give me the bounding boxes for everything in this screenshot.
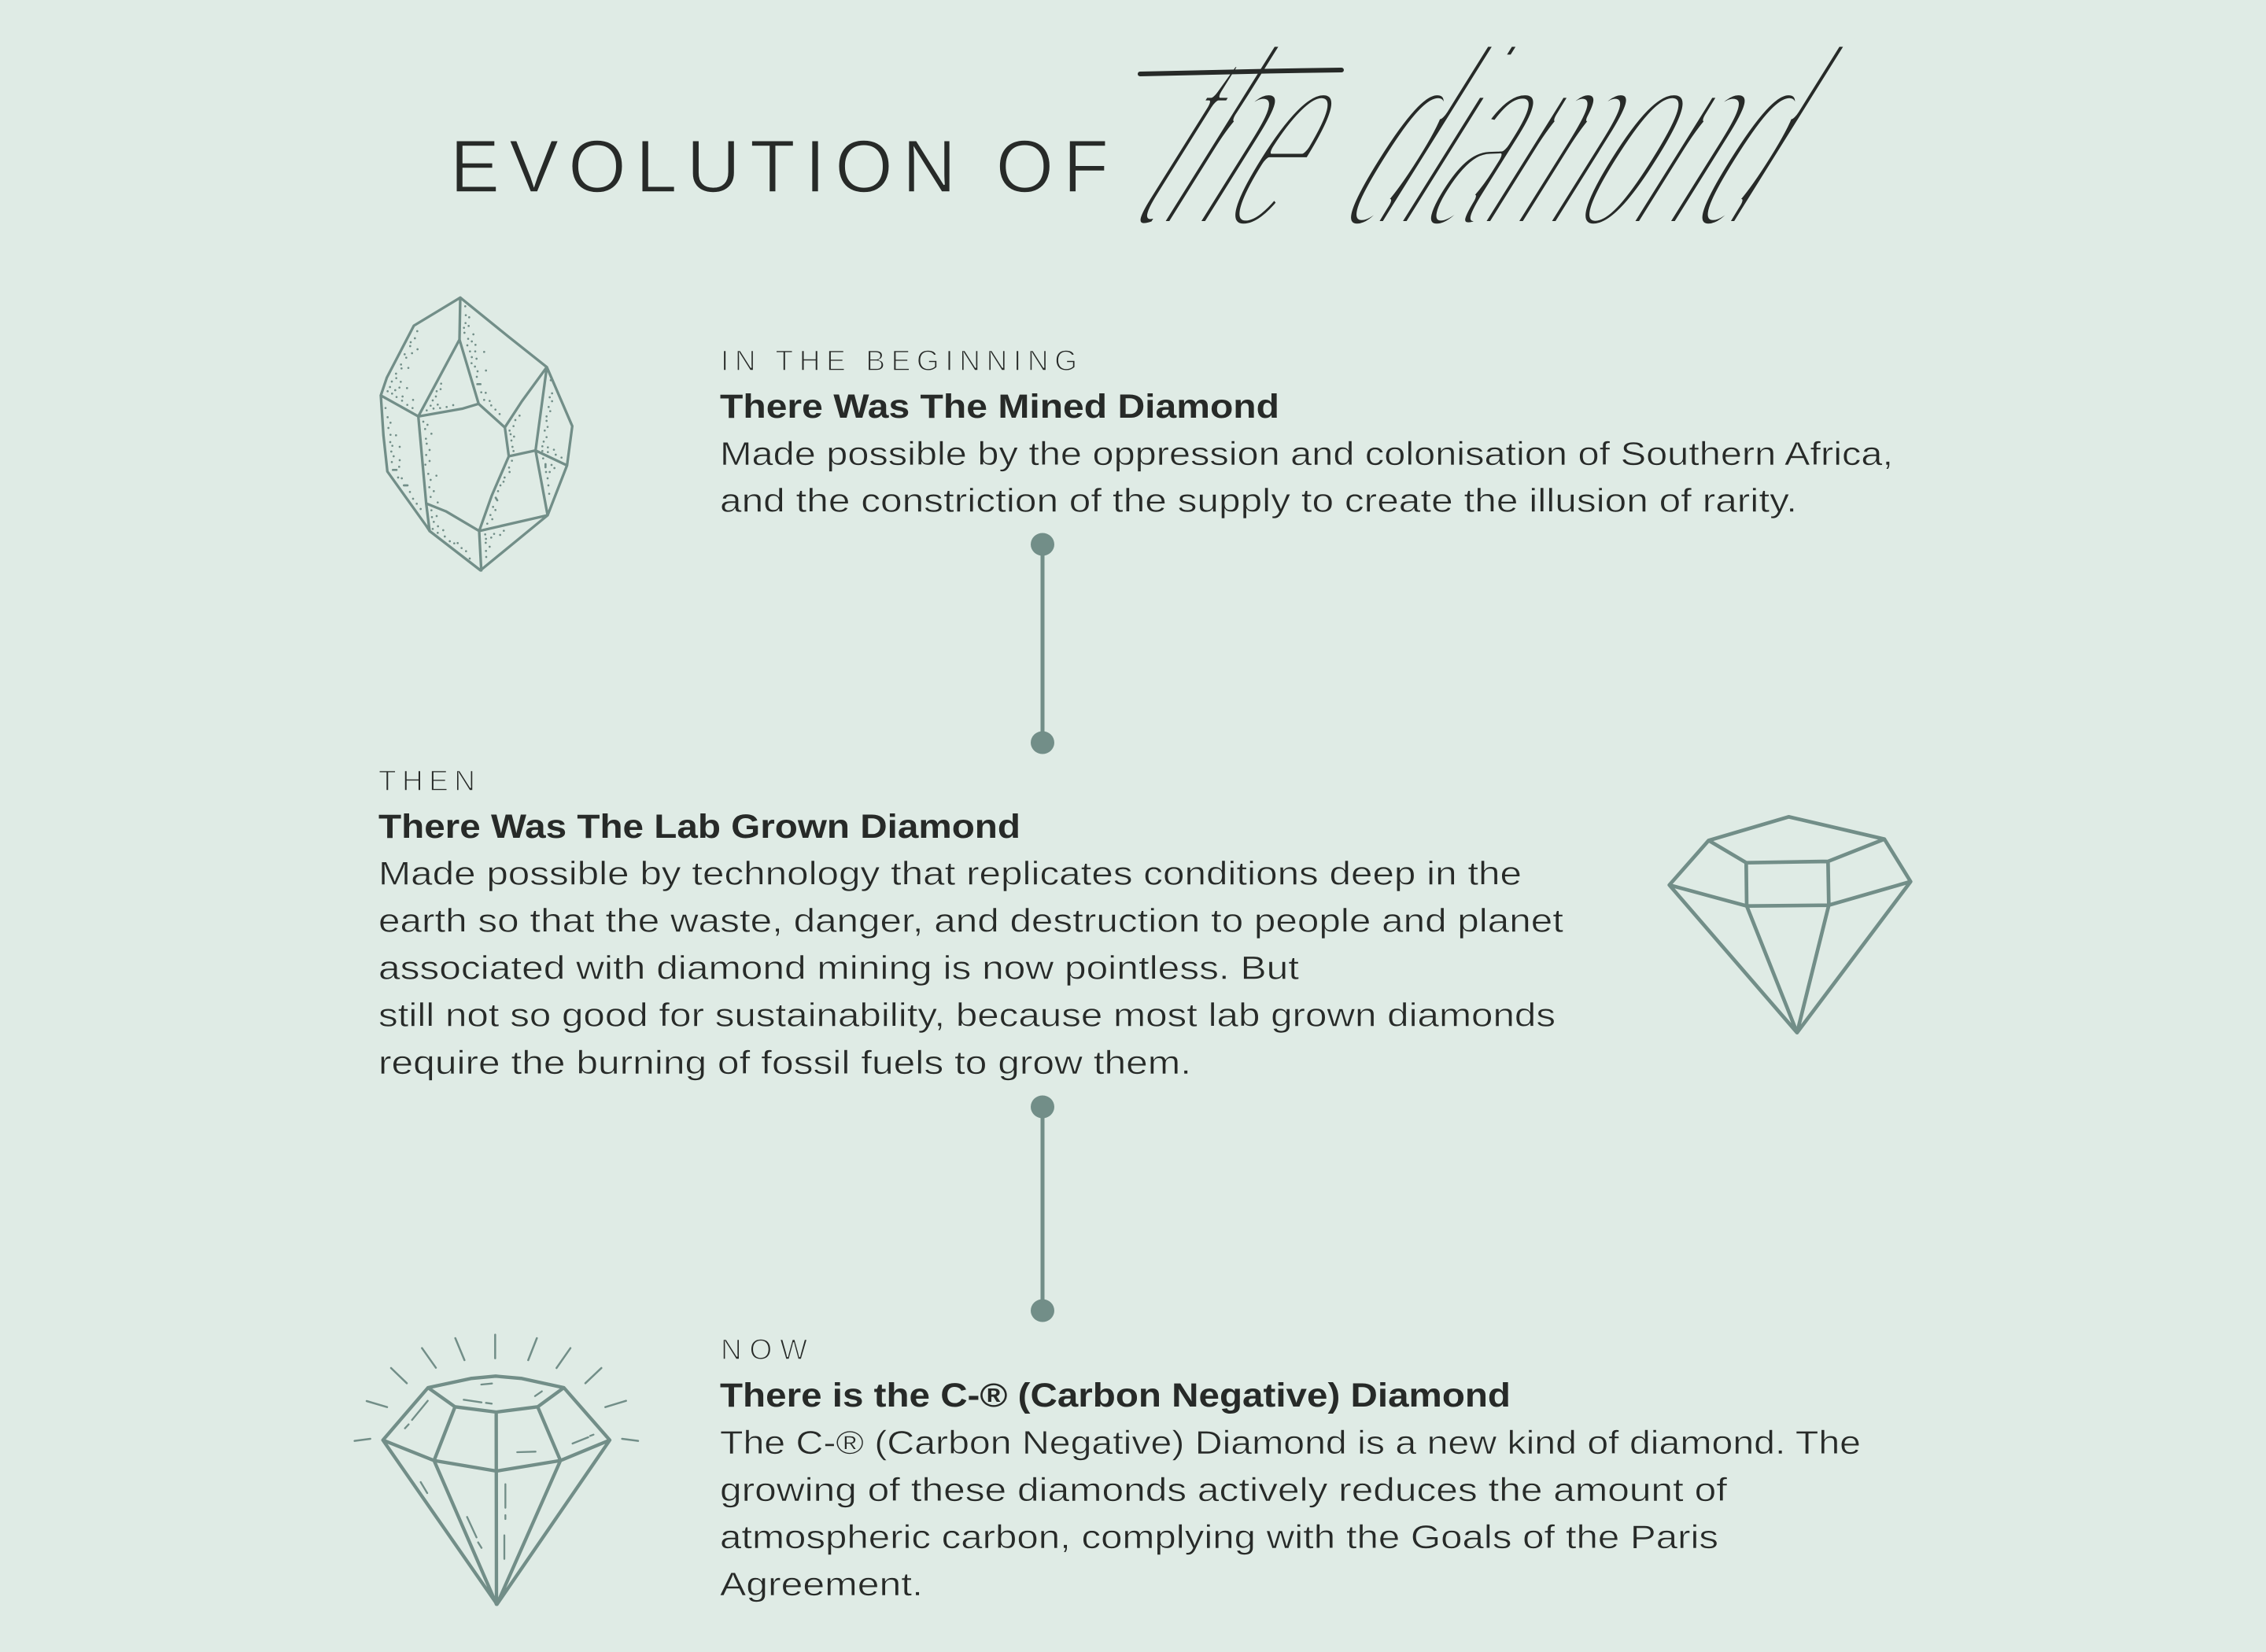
- text block: lab grown diamond: [378, 765, 1563, 1081]
- icon: lab grown diamond: [1670, 817, 1910, 1033]
- title: evolution of: EVOLUTION OF: [450, 125, 1109, 208]
- body: carbon negative diamond: The C-® (Carbon Negative) Diamond is a new kind of diamond. The: [720, 1424, 1861, 1461]
- heading: mined diamond: There Was The Mined Diamond: [720, 388, 1279, 426]
- title: the diamond script: the diamond: [1087, 0, 1887, 283]
- icon: rough mined diamond: [381, 297, 572, 570]
- body: carbon negative diamond: atmospheric carbon, complying with the Goals of the Paris: [720, 1518, 1718, 1555]
- body: lab grown diamond: associated with diamond mining is now pointless. But: [378, 949, 1299, 986]
- timeline connector 2: [1031, 1095, 1054, 1322]
- text block: carbon negative diamond: [720, 1333, 1861, 1602]
- body: mined diamond: and the constriction of the supply to create the illusion of rarity.: [720, 481, 1797, 519]
- body: lab grown diamond: still not so good for sustainability, because most lab grown diamonds: [378, 996, 1556, 1034]
- label: now: NOW: [721, 1333, 807, 1366]
- title: decorative swash: [1140, 70, 1342, 74]
- body: lab grown diamond: Made possible by technology that replicates conditions deep in the: [378, 854, 1522, 892]
- body: lab grown diamond: require the burning of fossil fuels to grow them.: [378, 1044, 1191, 1081]
- title: [450, 0, 1887, 283]
- body: carbon negative diamond: Agreement.: [720, 1565, 923, 1602]
- text block: mined diamond: [720, 345, 1893, 519]
- timeline connector 1: [1031, 533, 1054, 754]
- body: carbon negative diamond: growing of these diamonds actively reduces the amount of: [720, 1471, 1727, 1508]
- heading: lab grown diamond: There Was The Lab Grown Diamond: [378, 808, 1020, 846]
- label: in the beginning: IN THE BEGINNING: [721, 345, 1077, 377]
- label: then: THEN: [378, 765, 475, 797]
- icon: sparkling carbon negative diamond: [355, 1335, 638, 1604]
- body: mined diamond: Made possible by the oppression and colonisation of Southern Africa,: [720, 435, 1893, 472]
- body: lab grown diamond: earth so that the waste, danger, and destruction to people and planet: [378, 902, 1563, 939]
- heading: carbon negative diamond: There is the C-® (Carbon Negative) Diamond: [720, 1377, 1511, 1414]
